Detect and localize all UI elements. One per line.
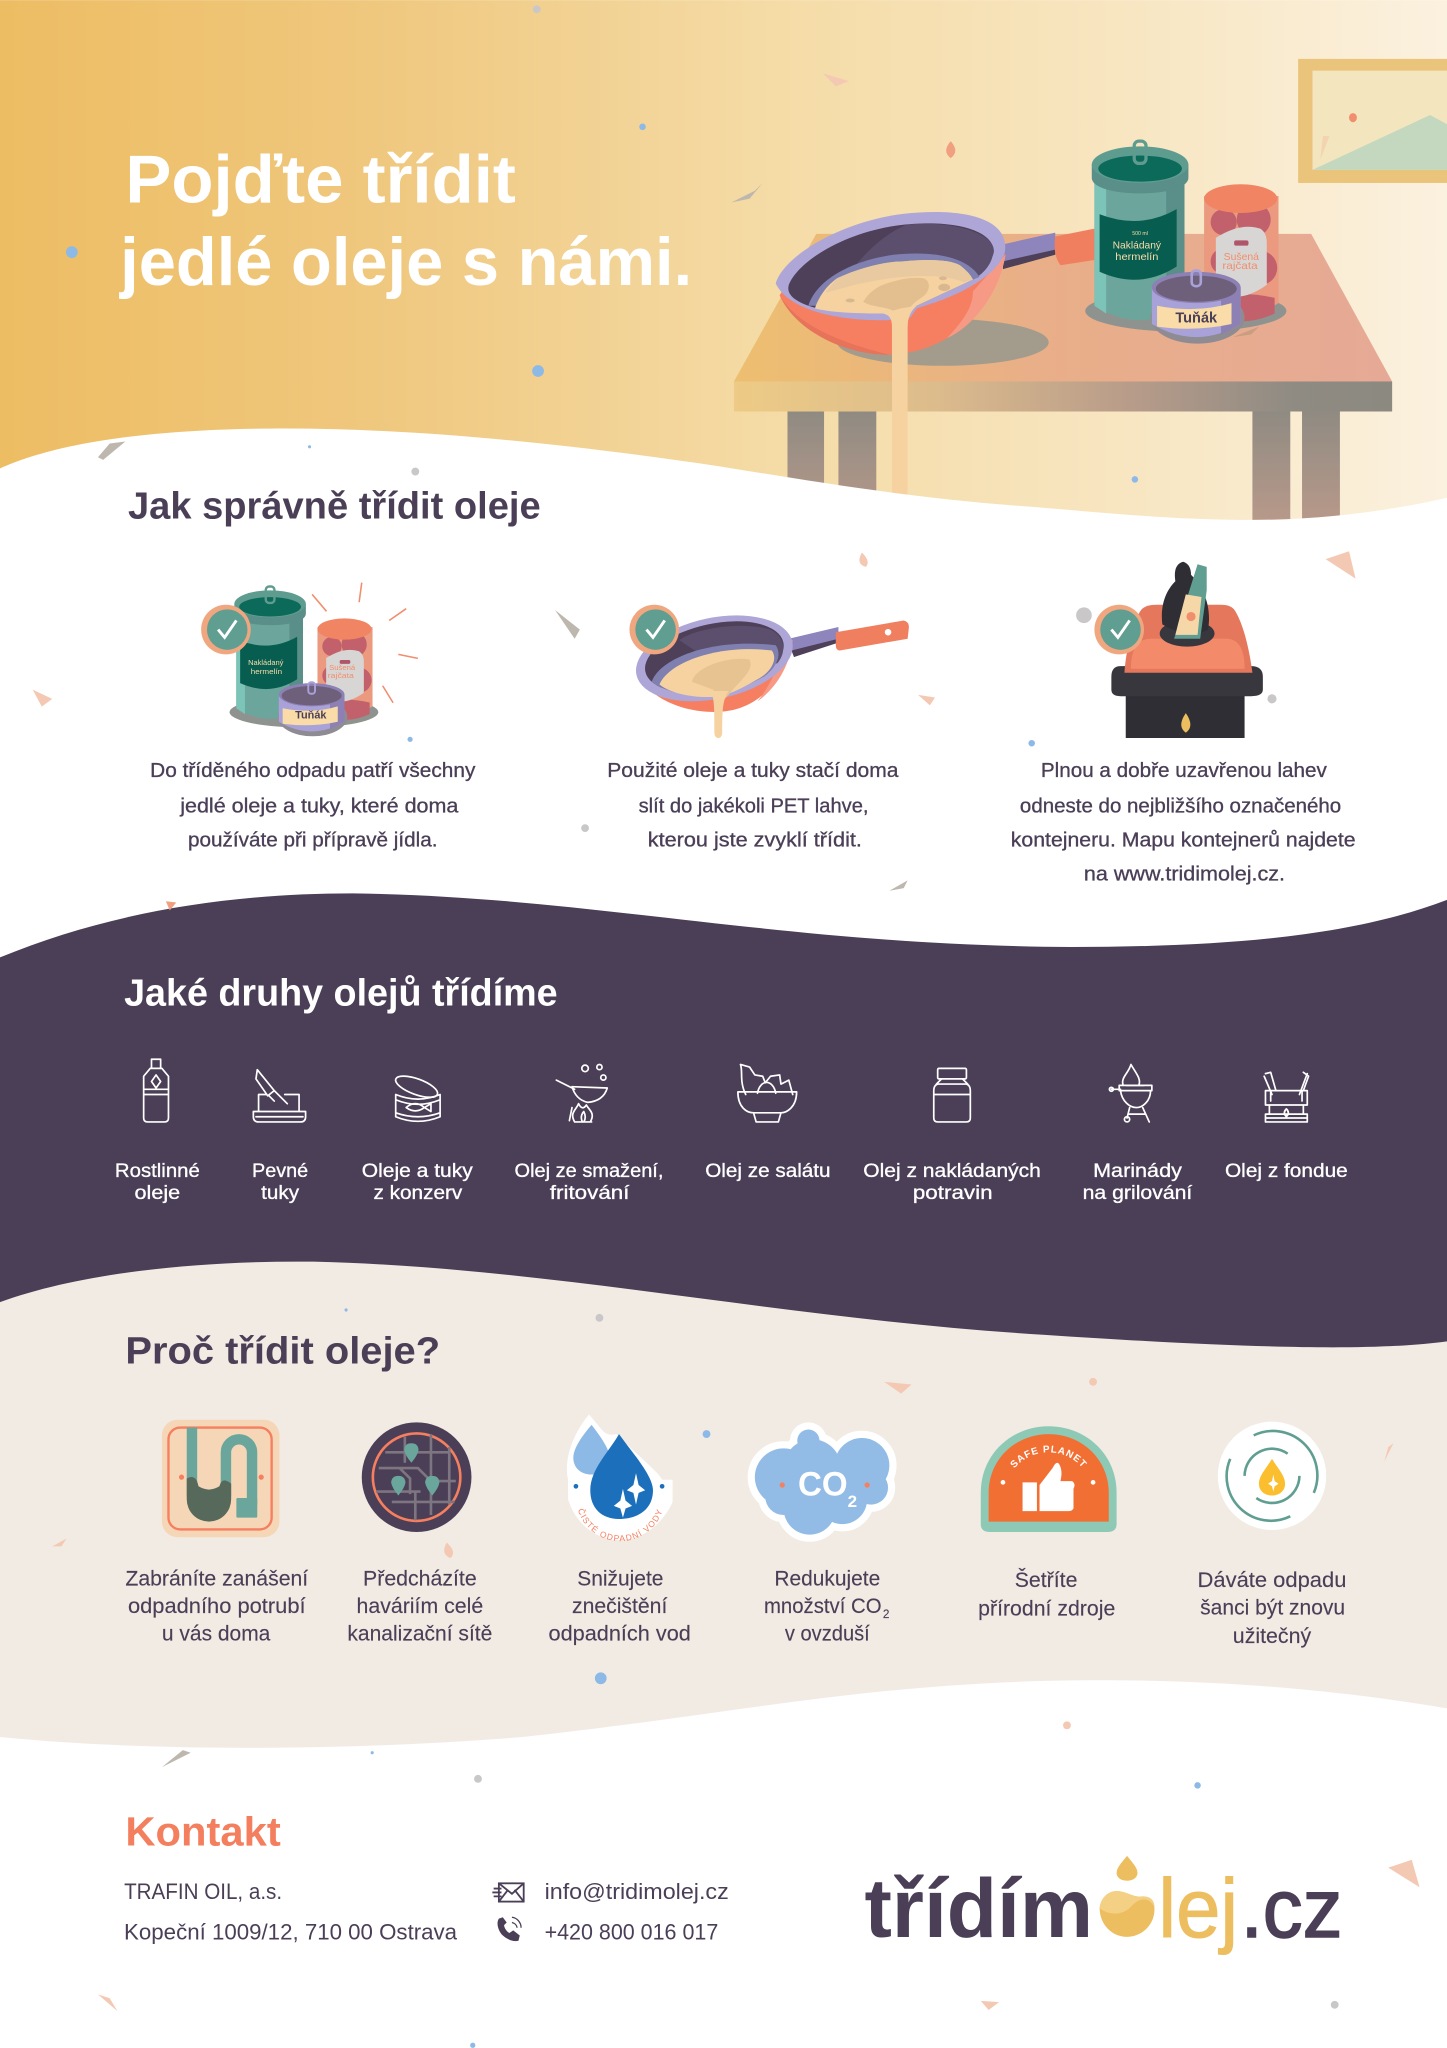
hero illustration: table [734, 234, 1392, 528]
icon: CO2 cloud [755, 1429, 889, 1535]
icon: recycling drop [1218, 1422, 1326, 1530]
icon: cans and jar: Tuňák [295, 709, 327, 721]
icon: pan [628, 602, 909, 738]
icon: drain pipe [162, 1420, 279, 1537]
icon: phone [498, 1917, 521, 1941]
icon: CO2 cloud: 2 [848, 1492, 857, 1511]
icon: check badge [629, 605, 679, 654]
label: grill marinades: na grilování [1083, 1182, 1193, 1204]
step 3 text [1011, 760, 1356, 885]
label: vegetable oils: Rostlinné [115, 1160, 200, 1182]
label: waste water [549, 1568, 691, 1645]
icon: container with bottle [1111, 562, 1263, 738]
icon: butter and knife [253, 1070, 306, 1122]
label: sewer accidents: haváriím celé [357, 1595, 483, 1618]
label: sewer accidents: Předcházíte [363, 1568, 477, 1591]
label: clogged pipes: u vás doma [162, 1622, 271, 1645]
label: CO2 reduction: Redukujete [774, 1568, 880, 1591]
label: grill marinades: Marinády [1093, 1160, 1182, 1182]
logo [865, 1856, 1343, 1955]
icon: frying pan with flames [556, 1064, 607, 1122]
panel: reasons [125, 1414, 1346, 1648]
title: Pojďte třídit [125, 143, 516, 218]
hero illustration: cans and jar: Tuňák [1175, 311, 1217, 327]
logo: lej [1158, 1861, 1238, 1955]
label: CO2 reduction: množství CO [764, 1595, 882, 1618]
step 2 text: kterou jste zvyklí třídit. [648, 829, 862, 851]
icon: cans and jar: Nakládaný [248, 659, 284, 667]
hero illustration: cans and jar: rajčata [1222, 261, 1258, 272]
panel: white section wave [0, 428, 1447, 940]
panel: purple section wave [0, 893, 1447, 1358]
label: solid fats: tuky [261, 1182, 299, 1204]
icon: cans and jar [230, 583, 418, 736]
step 1 text: jedlé oleje a tuky, které doma [179, 795, 459, 817]
icon: clean water drops [567, 1414, 672, 1542]
title [118, 143, 692, 300]
icon: safe planet badge: SAFE PLANET [1010, 1446, 1088, 1468]
icon: clean water drops: ČISTÉ ODPADNÍ VODY [578, 1508, 662, 1542]
label: sewer accidents [347, 1568, 492, 1645]
panel: step 1 [150, 583, 476, 851]
step 1 text: používáte při přípravě jídla. [188, 829, 437, 851]
label: fondue oil: Olej z fondue [1225, 1160, 1348, 1182]
label: waste water: odpadních vod [549, 1622, 691, 1645]
company address: Kopeční 1009/12, 710 00 Ostrava [124, 1919, 458, 1944]
step 2 text: slít do jakékoli PET lahve, [639, 795, 868, 817]
hero illustration: cans and jar [1085, 141, 1286, 344]
icon: sewer map [362, 1422, 471, 1532]
heading: why sort: Proč třídit oleje? [125, 1331, 440, 1373]
step 1 text: Do tříděného odpadu patří všechny [150, 760, 476, 782]
label: clogged pipes: odpadního potrubí [128, 1595, 306, 1618]
label: solid fats: Pevné [252, 1160, 308, 1182]
label: salad oil: Olej ze salátu [705, 1160, 831, 1182]
label: useful waste: užitečný [1233, 1625, 1312, 1648]
icon: envelope [492, 1883, 524, 1902]
step 2 text [607, 760, 899, 851]
label: CO2 reduction: v ovzduší [785, 1622, 870, 1645]
panel: contact [124, 1808, 729, 1944]
icon: safe planet badge [980, 1426, 1117, 1532]
label: natural resources: Šetříte [1015, 1569, 1077, 1592]
label: useful waste: šanci být znovu [1200, 1596, 1345, 1619]
icon: fondue [1264, 1072, 1309, 1122]
title: jedlé oleje s námi. [118, 225, 692, 300]
label: CO2 reduction [764, 1568, 889, 1645]
label: waste water: znečištění [572, 1595, 668, 1618]
label: solid fats [252, 1160, 308, 1204]
email: info@tridimolej.cz [545, 1879, 729, 1904]
step 3 text: Plnou a dobře uzavřenou lahev [1041, 760, 1328, 782]
icon: cans and jar: hermelín [251, 668, 282, 676]
label: clogged pipes: Zabráníte zanášení [125, 1568, 308, 1591]
icon: cans and jar: Sušená [329, 664, 355, 672]
label: natural resources [978, 1569, 1115, 1621]
label: canned fats [362, 1160, 473, 1204]
panel: white footer wave [0, 1680, 1447, 2048]
company address [124, 1879, 458, 1944]
label: sewer accidents: kanalizační sítě [347, 1622, 492, 1645]
icon: check badge [1094, 605, 1144, 654]
label: vegetable oils [115, 1160, 200, 1204]
label: vegetable oils: oleje [135, 1182, 180, 1204]
label: frying oil: Olej ze smažení, [515, 1160, 663, 1182]
step 3 text: na www.tridimolej.cz. [1084, 863, 1285, 885]
panel: beige section wave [0, 1262, 1447, 1750]
icon: salad bowl [738, 1064, 797, 1122]
phone number: +420 800 016 017 [545, 1919, 718, 1944]
heading: contact: Kontakt [125, 1808, 281, 1854]
label: frying oil: fritování [550, 1182, 630, 1204]
company address: TRAFIN OIL, a.s. [124, 1879, 282, 1904]
label: CO2 reduction: 2 [883, 1608, 889, 1621]
label: useful waste [1198, 1569, 1346, 1648]
step 3 text: kontejneru. Mapu kontejnerů najdete [1011, 829, 1356, 851]
step 2 text: Použité oleje a tuky stačí doma [607, 760, 899, 782]
logo: třídím [865, 1861, 1093, 1955]
panel: oil types list [115, 1059, 1348, 1204]
label: pickled food: potravin [913, 1182, 993, 1204]
label: useful waste: Dáváte odpadu [1198, 1569, 1346, 1592]
icon: check badge [201, 605, 251, 654]
icon: grill [1109, 1064, 1152, 1122]
hero illustration: picture on wall [1298, 59, 1447, 183]
label: frying oil [515, 1160, 663, 1204]
label: pickled food [863, 1160, 1041, 1204]
icon: cans and jar: rajčata [328, 672, 354, 680]
hero illustration: cans and jar: 500 ml [1132, 231, 1148, 237]
label: waste water: Snižujete [577, 1568, 663, 1591]
hero illustration: cans and jar: hermelín [1115, 252, 1158, 263]
icon: CO2 cloud: CO [798, 1465, 848, 1503]
logo: .cz [1241, 1861, 1343, 1955]
label: canned fats: z konzerv [374, 1182, 463, 1204]
panel: step 2 [607, 602, 909, 851]
icon: bottle [144, 1059, 168, 1122]
label: natural resources: přírodní zdroje [978, 1598, 1115, 1621]
label: grill marinades [1083, 1160, 1193, 1204]
heading: how to sort: Jak správně třídit oleje [128, 486, 541, 528]
icon: fish can [393, 1072, 440, 1121]
panel: hero background [0, 0, 1447, 529]
label: clogged pipes [125, 1568, 308, 1645]
step 3 text: odneste do nejbližšího označeného [1020, 795, 1341, 817]
hero illustration: cans and jar: Nakládaný [1113, 240, 1161, 251]
label: pickled food: Olej z nakládaných [863, 1160, 1041, 1182]
step 1 text [150, 760, 476, 851]
panel: step 3 [1011, 562, 1356, 885]
label: canned fats: Oleje a tuky [362, 1160, 473, 1182]
hero illustration: cans and jar: Sušená [1224, 252, 1260, 263]
heading: oil types: Jaké druhy olejů třídíme [124, 973, 558, 1015]
icon: jar [934, 1068, 970, 1122]
hero illustration: pan pouring oil [776, 212, 1094, 523]
